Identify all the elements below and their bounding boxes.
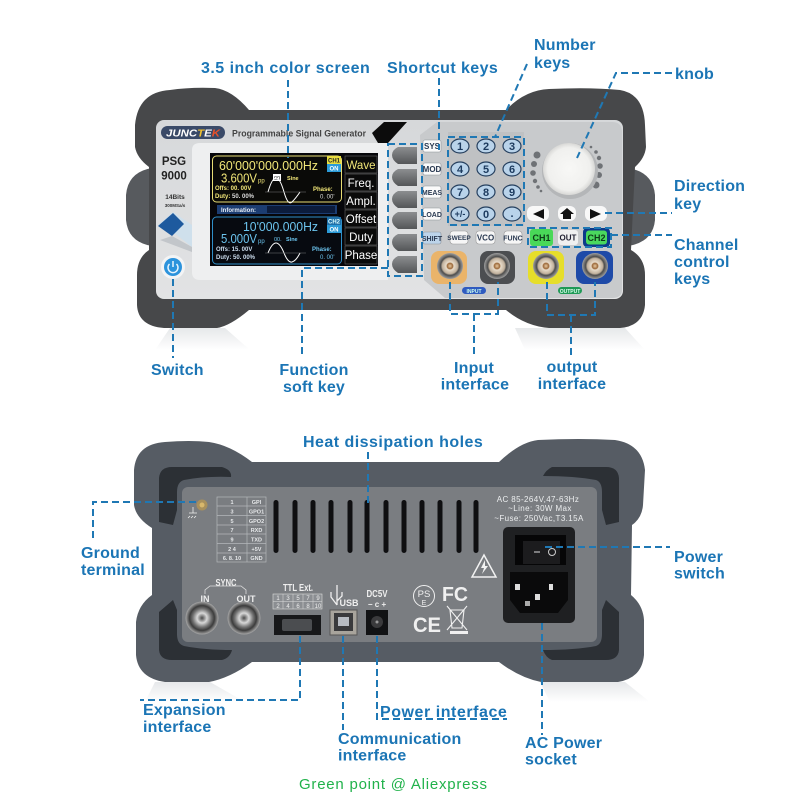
channel 2 readout: Duty: 50. 00% [216,255,256,261]
rear plate [182,487,597,642]
TTL ext connector: 7 [306,596,310,602]
softkey menu: Freq. [348,178,374,190]
softkey menu [345,156,377,264]
pin table [217,497,266,562]
BNC inputs and outputs [431,251,613,284]
sync connectors [186,578,260,634]
heading: power switch: switch [674,566,725,582]
softkey menu: Duty [349,232,373,244]
input pill: INPUT [466,289,482,295]
certification marks: PS [418,589,430,600]
heading: AC power socket: AC Power [525,735,602,752]
heading: power interface: Power interface [380,704,507,721]
heading: switch: Switch [151,362,204,379]
rear panel device [134,439,645,682]
pin table: 7 [230,528,234,534]
DC 5V jack [366,589,388,635]
heading: expansion interface: interface [143,719,212,736]
pin table: 6. 8. 10 [223,556,241,562]
heading: communication interface: Communication [338,731,462,748]
input pill [462,287,486,295]
pin table: 1 [230,500,234,506]
heading: function soft key: soft key [283,379,345,396]
model name: PSG [162,156,186,168]
softkey menu: Wave [347,160,375,172]
channel 1 readout: Duty: 50. 00% [215,194,255,200]
pin table: 9 [230,538,234,544]
heading: channel control keys: Channel [674,237,739,254]
channel keys: CH2 [587,233,606,243]
heading: heat dissipation holes: Heat dissipation holes [303,434,483,451]
TTL ext connector: 4 [286,604,290,610]
output pill [558,287,582,295]
channel 2 readout: 10'000.000Hz [243,219,318,234]
diamond logo [158,212,192,252]
model name: 9000 [161,170,187,182]
screen bezel [192,143,388,280]
number keys: 0 [483,209,489,221]
heading: input interface: interface [441,376,509,394]
pin table: GPO2 [249,519,264,525]
number keys: 7 [457,187,463,199]
DC 5V jack: DC5V [366,589,388,600]
softkey menu: Offset [346,214,377,226]
right control zone [420,122,622,298]
TTL ext connector: 6 [296,604,300,610]
shortcut keys: SYS [424,142,441,151]
pin table: TXD [251,538,262,544]
heading: channel control keys: keys [674,271,710,288]
light face plate [156,120,623,299]
channel 1 readout: 60'000'000.000Hz [219,158,318,173]
corner recesses [159,467,619,660]
channel 2 readout: Phase: [312,247,332,253]
ventilation slots [274,500,478,553]
power button [161,255,185,279]
certification marks: E [422,600,427,607]
USB port [330,585,359,635]
specs: 300MSa/s [165,203,186,208]
number keys: +/- [455,209,465,219]
TTL ext connector: 9 [316,596,320,602]
sync connectors: SYNC [216,578,236,589]
heading: output interface: output [547,359,597,376]
power socket [503,527,575,623]
information bar: Information: [221,208,256,214]
TTL ext connector: 8 [306,604,310,610]
heading: channel control keys: control [674,254,730,271]
TTL ext connector: 5 [296,596,300,602]
channel 2 readout: ON [330,228,338,234]
heading: communication interface: interface [338,748,406,764]
IEC inlet [510,572,568,613]
heading: input interface: Input [454,360,494,377]
shortcut keys: SHIFT [422,236,443,243]
function keys: FUNC [503,236,523,242]
heading: ground terminal: terminal [81,562,145,579]
output pill: OUTPUT [560,289,580,295]
channel 1 readout: 0. 00' [320,194,334,200]
rear bumper [134,439,645,682]
number keys: 9 [509,187,515,199]
rocker switch [515,535,566,565]
pin table: +5V [252,547,262,553]
shortcut keys: MEAS [422,190,442,197]
shortcut keys: MOD [423,165,442,174]
channel 1 readout: 3.600V [221,172,258,186]
specs: 14Bits [165,194,185,201]
channel keys [530,228,610,247]
pin table: 5 [230,519,234,525]
certification marks: FC [442,584,468,606]
front reflection [155,328,645,350]
knob [530,143,603,199]
callout lines [93,64,672,735]
shortcut keys: LOAD [422,212,442,219]
black trim [372,122,407,143]
shortcut keys [422,140,443,244]
TTL ext connector: 3 [286,596,290,602]
LCD screen [210,153,378,266]
function keys: VCO [477,234,494,242]
heading: function soft key: Function [279,362,349,379]
channel 1 readout: Sine [287,176,299,182]
heading: knob: knob [675,66,714,83]
heading: ground terminal: Ground [81,545,140,562]
DC 5V jack: − c + [368,600,386,609]
number keys: . [510,208,514,220]
heading: direction key: key [674,196,701,213]
right side handle [628,168,655,246]
rear reflection [145,682,650,702]
TTL ext connector [273,583,322,635]
number keys: 1 [457,141,463,153]
TTL ext connector: 10 [315,604,322,610]
channel 1 readout [212,156,342,203]
product subtitle: Programmable Signal Generator [232,128,366,138]
channel 1 readout: CH1 [328,158,341,164]
heading: output interface: interface [538,376,606,393]
channel 2 readout: Offs: 15. 00V [216,247,252,253]
heading: 3.5 inch color screen: 3.5 inch color screen [201,60,370,77]
channel keys: OUT [560,234,577,242]
specs [165,194,186,208]
heading: expansion interface: Expansion [143,702,226,719]
power ratings: AC 85-264V,47-63Hz [497,495,579,504]
warning triangle [472,555,496,577]
TTL ext connector: TTL Ext. [283,583,313,594]
front panel device [81,37,745,793]
certification marks [413,584,468,637]
watermark: Green point @ Aliexpress [299,776,487,793]
left side handle [126,168,152,246]
USB port: USB [339,598,359,608]
number keys: 5 [483,164,489,176]
channel 1 readout: Offs: 00. 00V [215,186,251,192]
information bar [217,205,337,214]
soft keys [392,147,417,273]
channel 1 readout: 00 [274,176,280,182]
number keys: 3 [509,141,515,153]
channel 1 readout: Phase: [313,187,333,193]
sync connectors: IN [200,594,210,604]
certification marks: CE [413,614,441,637]
pin table: GPO1 [249,510,264,516]
channel 2 readout [212,217,342,264]
heading: AC power socket: socket [525,752,577,768]
heading: shortcut keys: Shortcut keys [387,60,498,77]
heading: direction key: Direction [674,178,745,195]
power ratings [494,495,584,523]
channel 2 readout: Sine [286,237,298,243]
TTL ext connector: 2 [276,604,280,610]
pin table: 2 4 [228,547,237,553]
sync connectors: OUT [236,594,256,604]
channel 1 readout: ON [330,166,338,172]
TTL ext connector: 1 [276,596,280,602]
ground terminal [188,500,208,518]
brand logo: JUNCTEK [166,128,222,140]
heading: power switch: Power [674,549,723,566]
power ratings: ~Fuse: 250Vac,T3.15A [494,514,584,523]
channel 2 readout: CH2 [328,220,341,226]
function keys [447,231,523,244]
direction keys [527,206,607,221]
heading: number keys: keys [534,55,570,72]
number keys: 6 [509,164,515,176]
softkey menu: Phase [345,250,377,262]
number keys: 4 [457,164,464,176]
channel keys: CH1 [532,233,551,243]
pin table: RXD [251,528,262,534]
channel 1 readout: pp [258,178,265,184]
channel 2 readout: 0. 00' [320,255,334,261]
number keys [448,132,524,226]
channel 2 readout: 00. [274,237,282,243]
channel 2 readout: pp [258,239,265,245]
heading: number keys: Number [534,37,596,54]
power ratings: ~Line: 30W Max [508,504,572,513]
dark bumper [135,88,646,328]
number keys: 8 [483,187,489,199]
pin table: 3 [230,510,234,516]
pin table: GPI [252,500,262,506]
softkey menu: Ampl. [346,196,376,208]
pin table: GND [250,556,263,562]
number keys: 2 [483,141,489,153]
function keys: SWEEP [447,235,471,242]
channel 2 readout: 5.000V [221,232,258,246]
